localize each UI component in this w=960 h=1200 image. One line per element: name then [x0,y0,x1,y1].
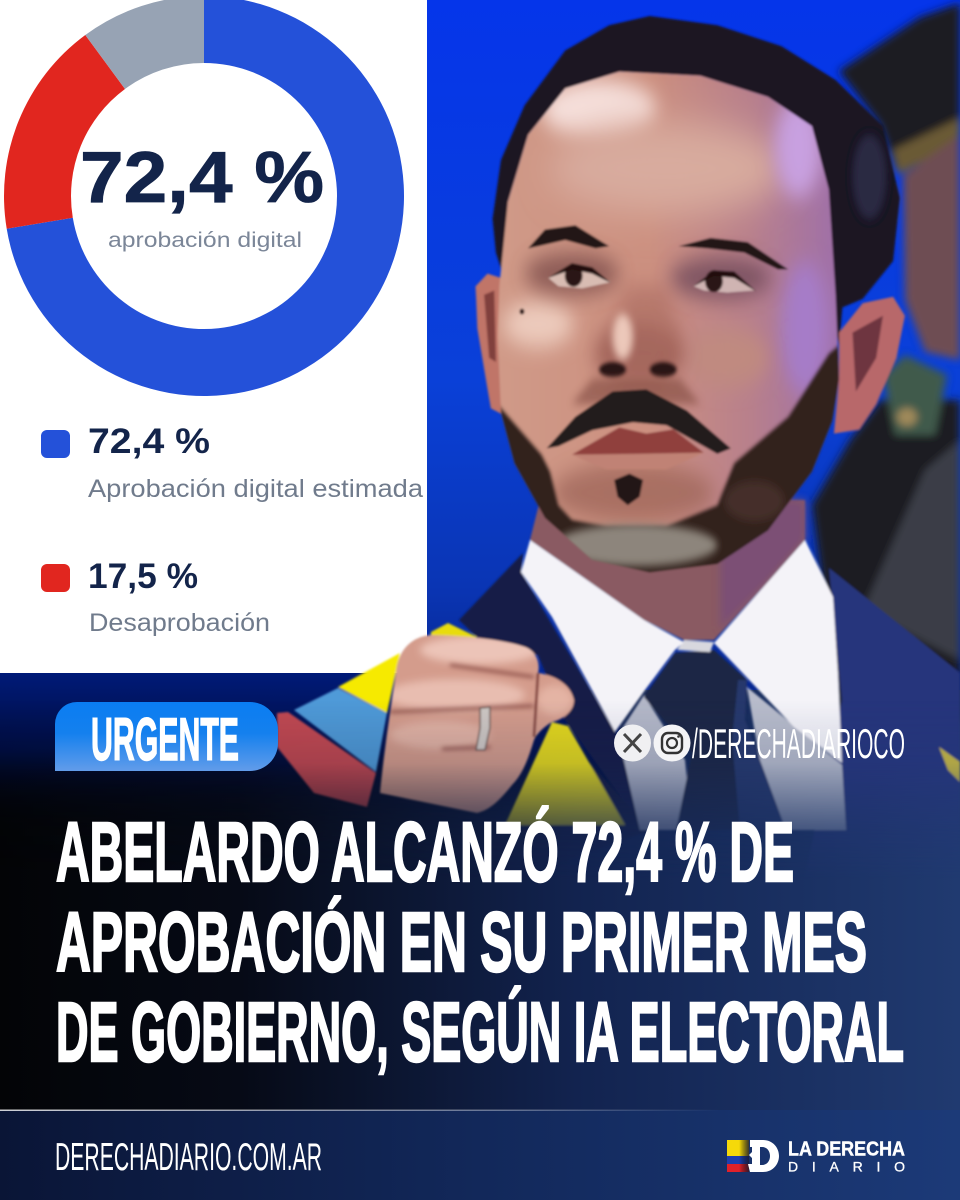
moustache [547,389,731,454]
legend: approval [41,422,423,503]
caption: Aprobación digital estimada [88,475,423,503]
sash flag: yellow [338,653,400,713]
caption: Desaprobación [89,609,270,637]
soul patch [614,474,643,505]
swatch red [41,564,70,592]
eyebrow right [678,238,788,269]
grey chin [555,524,717,566]
logo wordmark top: LA DERECHA [788,1138,905,1160]
segment: other 10.1% [85,0,204,89]
suit jacket left [459,553,645,830]
sash flag: right yellow [505,722,625,825]
badge label: URGENTE [91,706,239,773]
segment: approval 72.4% [7,0,404,396]
shirt collar left [521,540,684,732]
ring [476,707,490,750]
suit jacket right [816,567,960,832]
eyebrow left [528,225,609,248]
panel: white chart card [0,0,427,673]
lips [572,427,704,455]
social handle [614,720,905,767]
bottom band background [0,673,960,1200]
footer website: DERECHADIARIO.COM.AR [55,1136,322,1179]
logo D mark [748,1140,779,1172]
fade overlay over photo [0,660,960,1110]
jacket pin [939,747,960,782]
icon: X [614,724,651,762]
sash flag: blue [294,688,387,772]
collar knot highlight [677,640,714,652]
donut chart [4,0,404,396]
eye right [694,273,754,293]
beard speckle [724,480,785,522]
eye socket shade [525,253,619,295]
face [498,72,839,573]
swatch blue [41,430,70,458]
fist with ring [380,635,574,813]
value 72,4: 72,4 % [88,422,210,461]
donut centre label: aprobación digital [108,229,302,252]
headline [56,805,904,1079]
photo background: blue stage [427,0,960,690]
value 17,5: 17,5 % [88,557,198,596]
chin skin shade [552,463,714,522]
temple lavender highlight [775,97,822,198]
hair highlight [852,135,886,219]
donut centre value: 72,4 % [80,138,324,218]
hair [493,16,900,345]
urgente badge [55,702,278,773]
logo: La Derecha Diario [727,1138,905,1174]
ear left [476,274,503,415]
logo flag [727,1140,749,1172]
photo: man with presidential sash [277,3,960,900]
ear right [834,297,905,434]
segment: disapproval 17.5% [4,35,125,229]
tie [644,648,748,831]
logo wordmark bottom: DIARIO [788,1158,905,1174]
background officer (blurred) [812,3,960,720]
beard [498,341,844,581]
cheek light [503,301,574,347]
head group [476,16,905,581]
nose [596,324,684,383]
legend: disapproval [41,557,270,637]
sash flag: red [277,712,376,807]
shirt below collar [618,695,692,830]
moles [520,309,524,314]
forehead highlight [542,80,656,139]
neck [530,500,805,640]
shirt collar right [714,540,842,763]
sash flag: top yellow [429,622,478,640]
icon: Instagram [654,724,690,762]
footer band [0,1110,960,1200]
eye left [548,270,610,290]
